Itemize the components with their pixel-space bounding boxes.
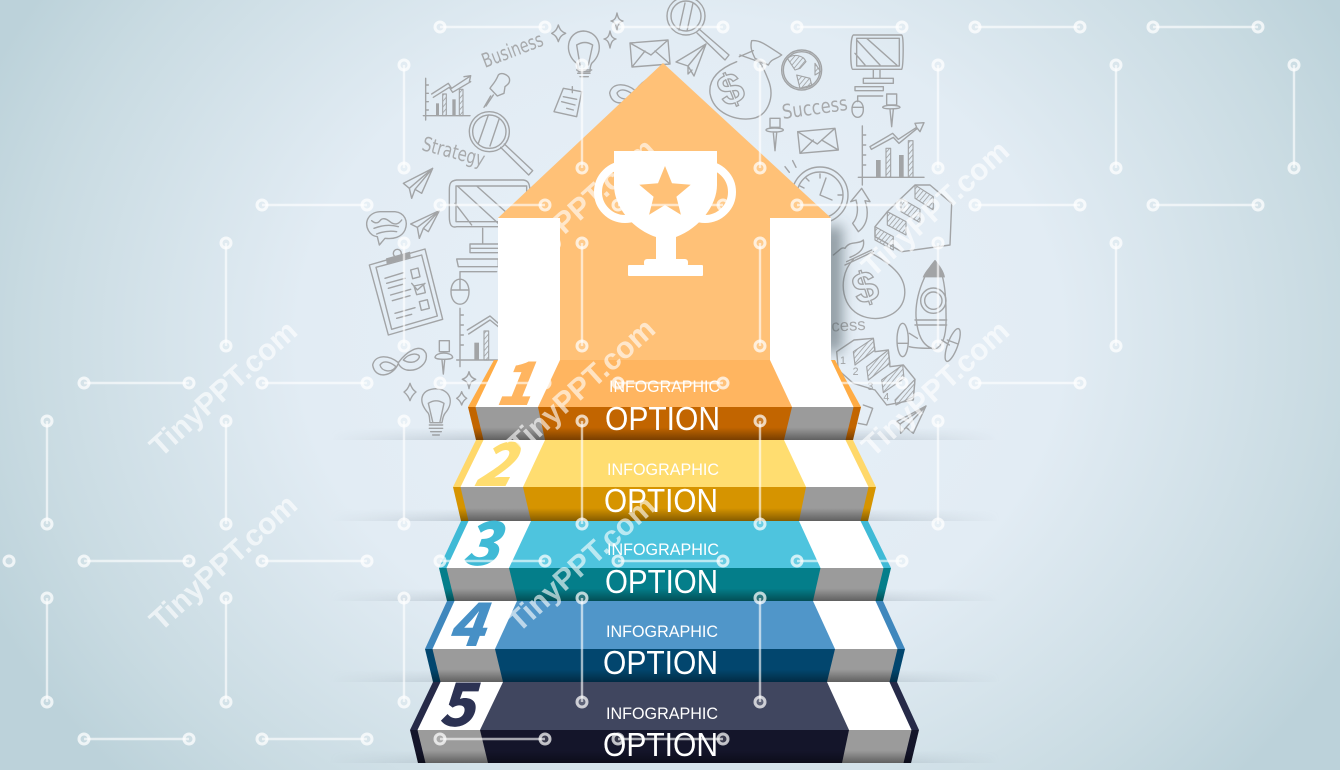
envelope [798,128,838,153]
pin lying [858,405,873,425]
doodle: Strategy label: Strategy [420,132,488,171]
stars [404,372,476,405]
step 5 title: OPTION [603,726,718,763]
doodle: Success label: Success [780,91,849,124]
doodle: Business label: Business [478,27,547,73]
step 1 title: OPTION [605,400,720,437]
doodle: magnifier top [667,0,729,60]
sticky note [554,87,582,117]
watermark 1: TinyPPT.com [143,314,304,463]
push pin [484,74,510,107]
icon: trophy [598,151,732,276]
paper plane [897,406,926,433]
doodle group: top left icons [423,25,599,175]
watermark 6: TinyPPT.com [855,134,1016,283]
step shadows [366,431,964,763]
step 5 label: INFOGRAPHIC [606,705,718,723]
monitor [449,180,530,253]
partial Success label: cess [831,315,866,336]
doodle: infinity top [610,76,663,103]
doodle group: lower right icons [831,185,963,433]
step number 5: 5 [433,656,493,744]
pin right [883,94,900,127]
step 1: orange [468,336,861,440]
watermark 3: TinyPPT.com [501,132,662,281]
step 4 label: INFOGRAPHIC [606,623,718,641]
doodle: star top small [604,31,616,48]
step number 4: 4 [440,576,508,663]
pin center [766,118,783,151]
chart right [858,123,924,185]
dollar sign: $ [847,261,884,315]
step number 2: 2 [463,417,544,504]
step 5: navy [410,656,919,763]
house arrow body [498,63,831,362]
rising stairs [875,185,952,252]
mouse [451,259,498,304]
step 2 title: OPTION [604,482,718,519]
house arrow with trophy [498,63,842,362]
step 3 label: INFOGRAPHIC [607,541,719,559]
monitor [851,35,903,91]
paper plane lower [411,211,439,238]
watermark 5: TinyPPT.com [501,489,662,638]
doodle: clock [792,167,848,223]
numbered podium: 3 [867,381,873,393]
step 2 label: INFOGRAPHIC [607,461,719,479]
doodle group: lower left icons [367,168,530,435]
step 2: yellow [453,417,876,521]
chart left [423,76,471,120]
step number 1: 1 [487,336,559,422]
doodle: envelope top [630,40,670,67]
white wall right [770,218,831,362]
light bulb [422,389,450,435]
infinity [373,348,426,375]
money bag [833,240,905,318]
step 4 title: OPTION [603,644,718,681]
pin [435,341,453,374]
doodle: star top [611,13,623,30]
up arrow [851,188,870,232]
numbered podium: 1 [840,355,846,367]
step 1 label: INFOGRAPHIC [609,378,720,396]
numbered podium: 2 [853,366,859,378]
doodle: paper plane top [676,44,706,76]
stairs [410,336,919,763]
step 4: blue [425,576,905,682]
numbered podium: 4 [883,392,889,404]
dollar sign: $ [711,63,751,117]
money bag [710,41,782,119]
globe [782,50,822,90]
rocket [897,261,963,363]
light bulb [568,31,599,77]
watermark 7: TinyPPT.com [855,314,1016,463]
house shadow [824,226,842,352]
speech bubble [367,212,406,245]
doodle icon cloud [367,0,963,435]
watermarks [143,132,1016,638]
magnifier [469,112,533,175]
white wall left [498,218,560,362]
chart [457,308,498,367]
step 3 title: OPTION [605,563,718,600]
numbered podium [837,338,915,405]
clipboard [369,249,443,335]
star [552,25,566,42]
clock rays [785,161,796,172]
watermark 4: TinyPPT.com [501,312,662,461]
mouse [852,96,883,117]
watermark 2: TinyPPT.com [143,488,304,637]
doodle group: top right icons [710,35,924,185]
step 3: teal [439,495,891,601]
paper plane upper [403,168,433,198]
step number 3: 3 [455,495,523,582]
